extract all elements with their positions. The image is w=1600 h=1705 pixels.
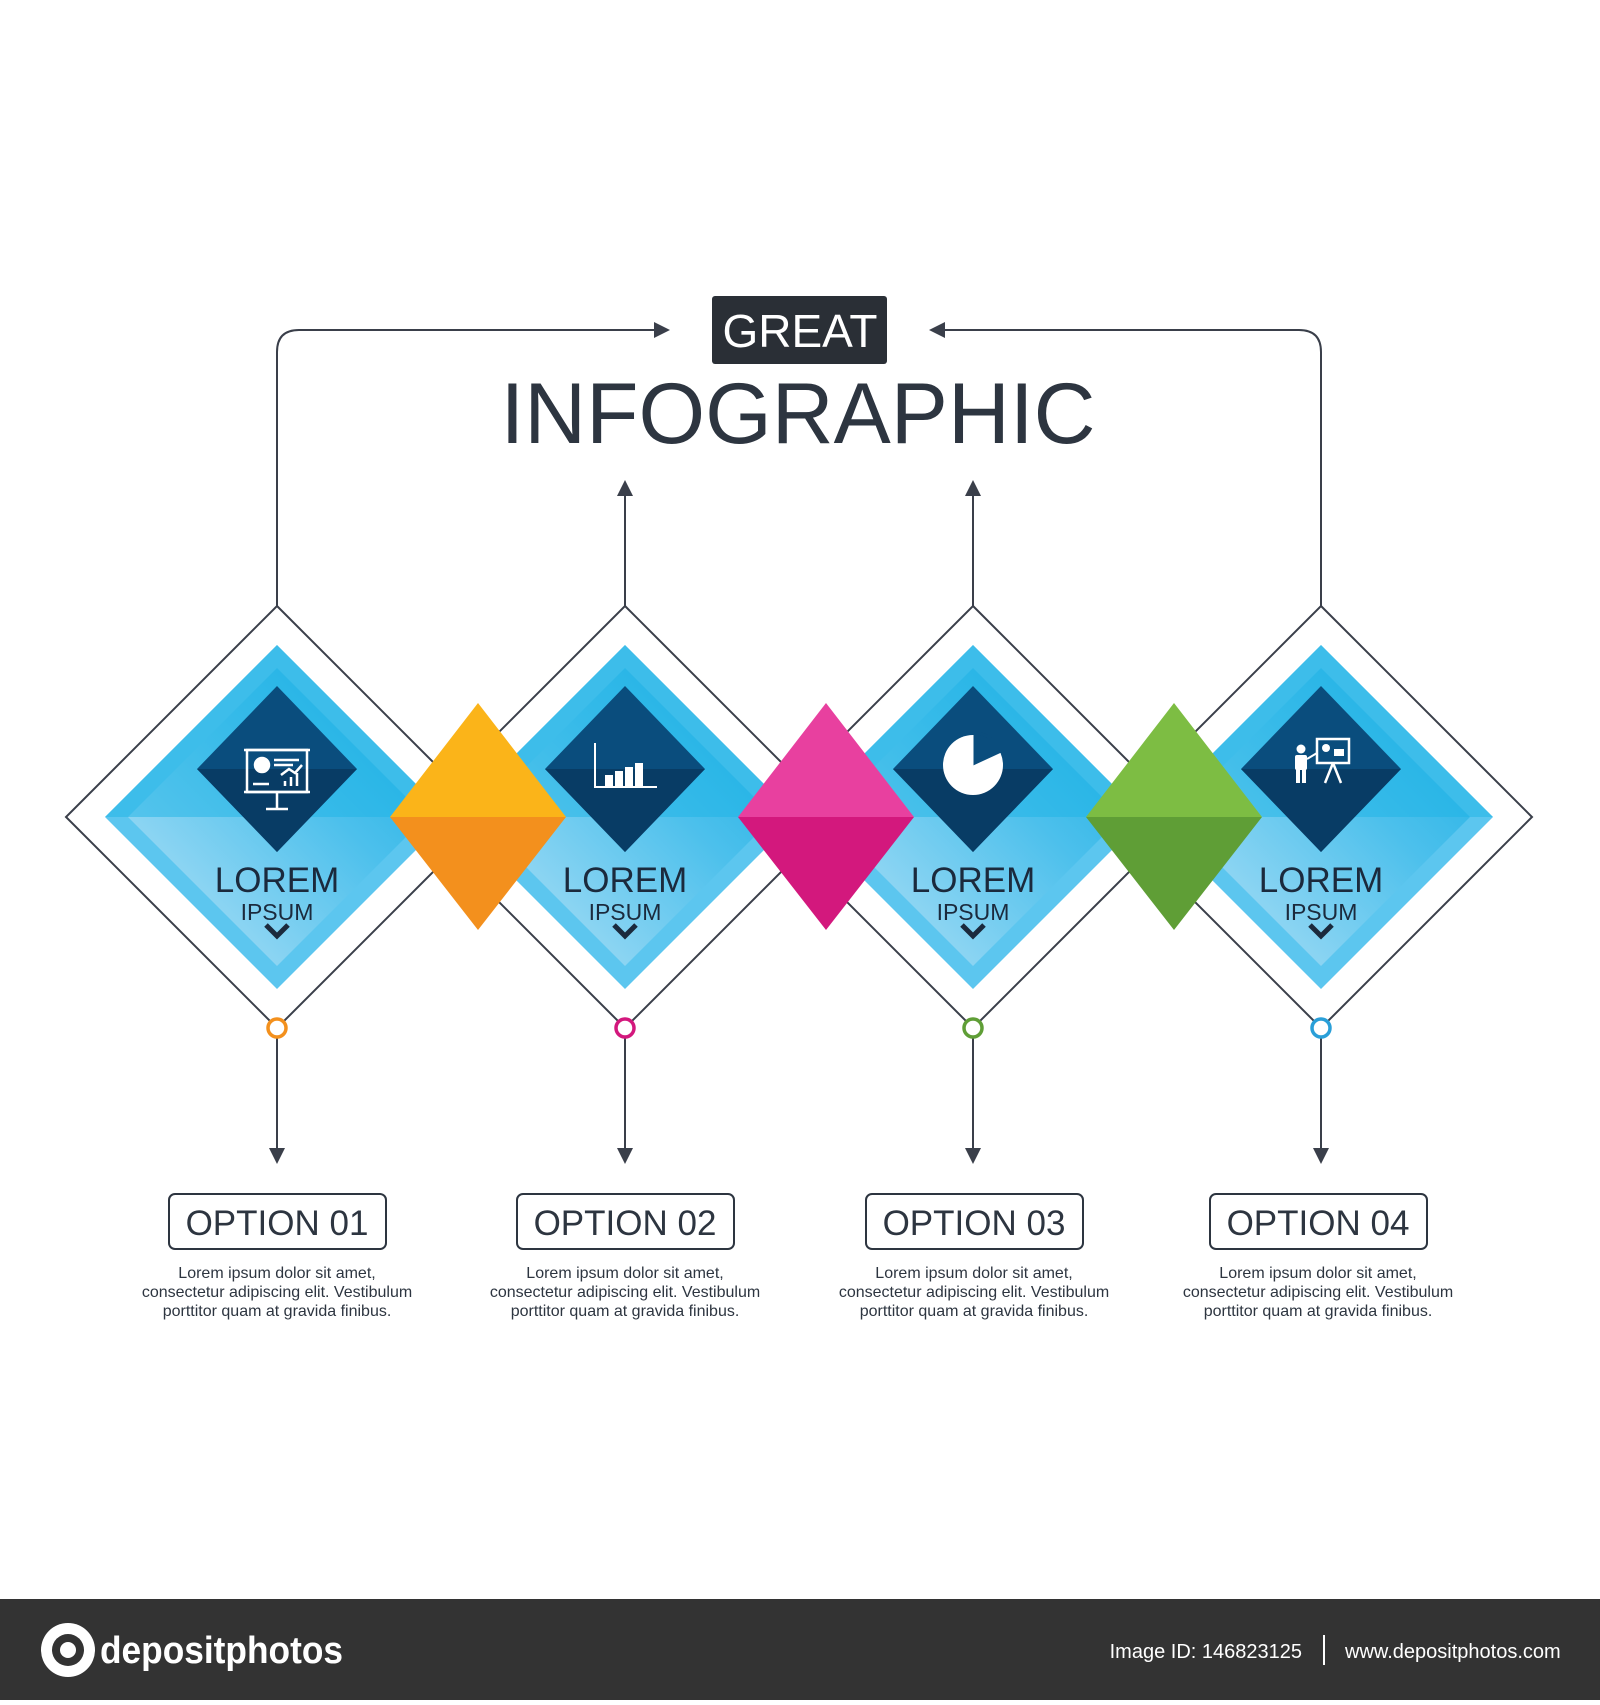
option 01: porttitor quam at gravida finibus. <box>163 1303 391 1320</box>
icon: logo <box>41 1623 95 1677</box>
icon: presenter <box>1295 739 1349 783</box>
title badge: GREAT: GREAT <box>722 305 878 357</box>
option 01 <box>142 1194 412 1320</box>
icon: bar chart <box>595 743 657 787</box>
icon: pie chart <box>943 733 1003 795</box>
footer bar: depositphotos <box>100 1630 343 1672</box>
label: LOREM IPSUM <box>1259 861 1383 936</box>
option 04: OPTION 04 <box>1227 1204 1409 1243</box>
footer bar: www.depositphotos.com <box>1344 1641 1561 1663</box>
label: LOREM IPSUM <box>215 861 339 936</box>
option 04: porttitor quam at gravida finibus. <box>1204 1303 1432 1320</box>
step 1 diamond <box>66 606 488 1028</box>
option 01: OPTION 01 <box>186 1204 368 1243</box>
option 02 <box>490 1194 760 1320</box>
label: LOREM IPSUM: LOREM <box>1259 861 1383 900</box>
label: LOREM IPSUM <box>563 861 687 936</box>
title badge: GREAT <box>712 296 887 364</box>
option 02: porttitor quam at gravida finibus. <box>511 1303 739 1320</box>
option 01: Lorem ipsum dolor sit amet, <box>178 1265 376 1282</box>
option 03: porttitor quam at gravida finibus. <box>860 1303 1088 1320</box>
label: LOREM IPSUM <box>911 861 1035 936</box>
option 04: consectetur adipiscing elit. Vestibulum <box>1183 1284 1453 1301</box>
option 02: consectetur adipiscing elit. Vestibulum <box>490 1284 760 1301</box>
option 02: Lorem ipsum dolor sit amet, <box>526 1265 724 1282</box>
arrow: right top connector <box>931 330 1321 606</box>
option 04: Lorem ipsum dolor sit amet, <box>1219 1265 1417 1282</box>
option 03: Lorem ipsum dolor sit amet, <box>875 1265 1073 1282</box>
title: INFOGRAPHIC: INFOGRAPHIC <box>500 366 1096 462</box>
label: LOREM IPSUM: IPSUM <box>241 899 313 925</box>
label: LOREM IPSUM: IPSUM <box>937 899 1009 925</box>
connector diamond: orange <box>390 703 566 930</box>
option 04 <box>1183 1194 1453 1320</box>
step 2 diamond <box>414 606 836 1028</box>
arrow: left top connector <box>277 330 668 606</box>
step 4 diamond <box>1110 606 1532 1028</box>
option 03: consectetur adipiscing elit. Vestibulum <box>839 1284 1109 1301</box>
label: LOREM IPSUM: IPSUM <box>1285 899 1357 925</box>
connector diamond: pink <box>738 703 914 930</box>
label: LOREM IPSUM: LOREM <box>563 861 687 900</box>
option 01: consectetur adipiscing elit. Vestibulum <box>142 1284 412 1301</box>
option 02: OPTION 02 <box>534 1204 716 1243</box>
footer bar <box>0 1599 1600 1700</box>
step 3 diamond <box>762 606 1184 1028</box>
label: LOREM IPSUM: LOREM <box>215 861 339 900</box>
icon: presentation board <box>244 750 310 809</box>
option 03 <box>839 1194 1109 1320</box>
label: LOREM IPSUM: IPSUM <box>589 899 661 925</box>
down arrows with circles <box>277 1038 1321 1162</box>
footer bar: Image ID: 146823125 <box>1110 1641 1302 1663</box>
arrow: up 03 <box>972 482 974 606</box>
label: LOREM IPSUM: LOREM <box>911 861 1035 900</box>
arrow: up 02 <box>624 482 626 606</box>
connector diamond: green <box>1086 703 1262 930</box>
option 03: OPTION 03 <box>883 1204 1065 1243</box>
